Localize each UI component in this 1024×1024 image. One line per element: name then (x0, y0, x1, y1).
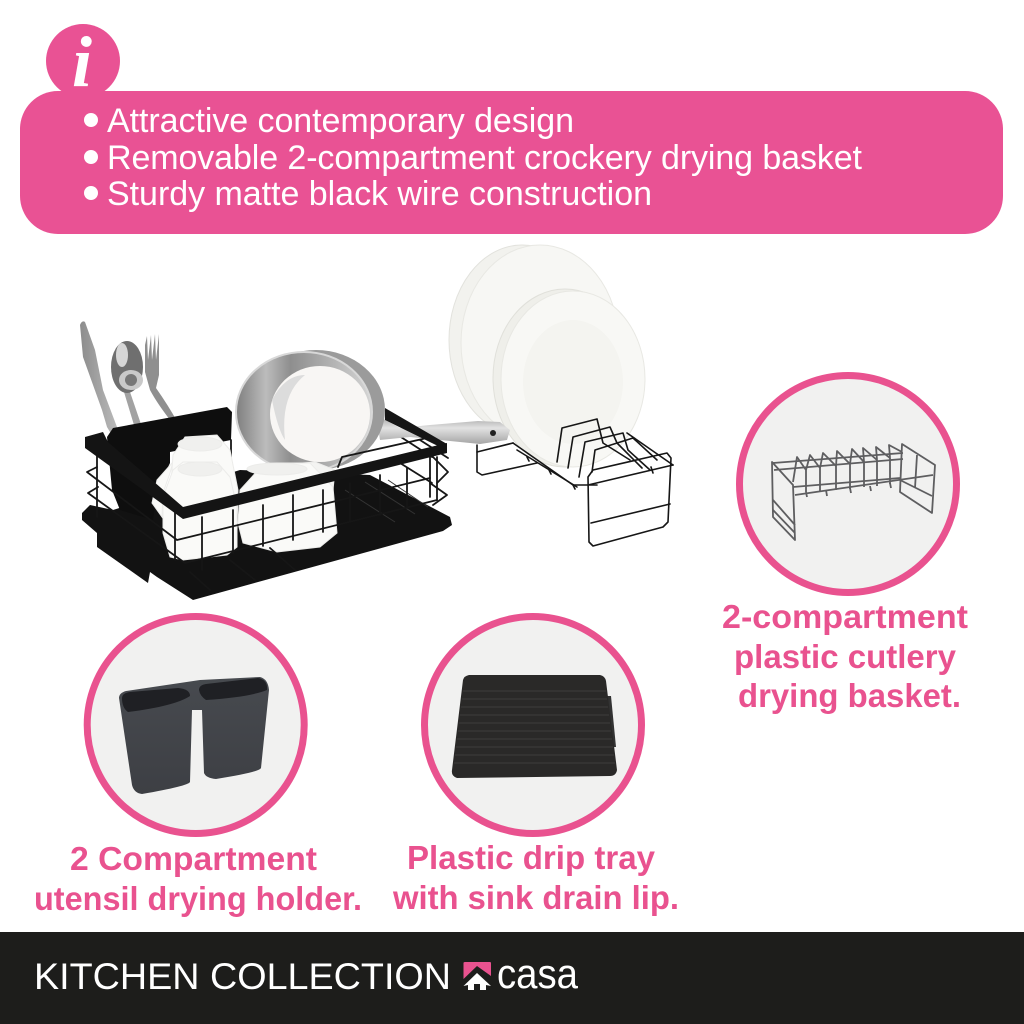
caption: cutlery basket: drying basket. (738, 677, 961, 714)
caption: drip tray: with sink drain lip. (392, 879, 679, 916)
casa logo icon (464, 962, 491, 990)
casa wordmark: casa (497, 950, 579, 997)
rack back wires (231, 430, 448, 483)
caption: utensil holder: 2 Compartment (70, 840, 317, 877)
drip tray (82, 470, 452, 600)
caption: drip tray: Plastic drip tray (407, 839, 656, 876)
circle: utensil holder detail (87, 616, 304, 834)
black cutlery holder (107, 407, 232, 520)
caption: cutlery basket: plastic cutlery (734, 638, 957, 675)
feature list: Sturdy matte black wire construction (107, 175, 652, 213)
feature list (84, 102, 863, 213)
info badge: i (72, 22, 92, 102)
feature list: Attractive contemporary design (107, 102, 574, 140)
caption: cutlery basket (722, 598, 968, 714)
footer bar (0, 932, 1024, 1024)
frying pan (236, 350, 510, 472)
caption: cutlery basket: 2-compartment (722, 598, 968, 635)
banner background (20, 91, 1003, 234)
icon: drip tray (452, 675, 617, 778)
rack front wires (87, 438, 448, 590)
icon: mini plate rack (772, 444, 935, 540)
plate rack wires (477, 419, 673, 546)
rack rim (85, 432, 447, 519)
cutlery (80, 321, 178, 437)
info banner (20, 22, 1003, 234)
main product photo: dish rack (80, 245, 673, 600)
caption: utensil holder (34, 840, 362, 917)
brand name: KITCHEN COLLECTION (34, 956, 451, 997)
tray ribs (345, 480, 428, 522)
caption: utensil holder: utensil drying holder. (34, 880, 362, 917)
caption: drip tray (392, 839, 679, 916)
plates (449, 245, 645, 467)
icon: utensil holder (119, 677, 269, 794)
info badge (46, 22, 120, 102)
white cups (152, 435, 337, 560)
circle: plate rack detail (740, 376, 956, 592)
feature list: Removable 2-compartment crockery drying basket (107, 139, 863, 177)
circle: drip tray detail (424, 616, 642, 834)
